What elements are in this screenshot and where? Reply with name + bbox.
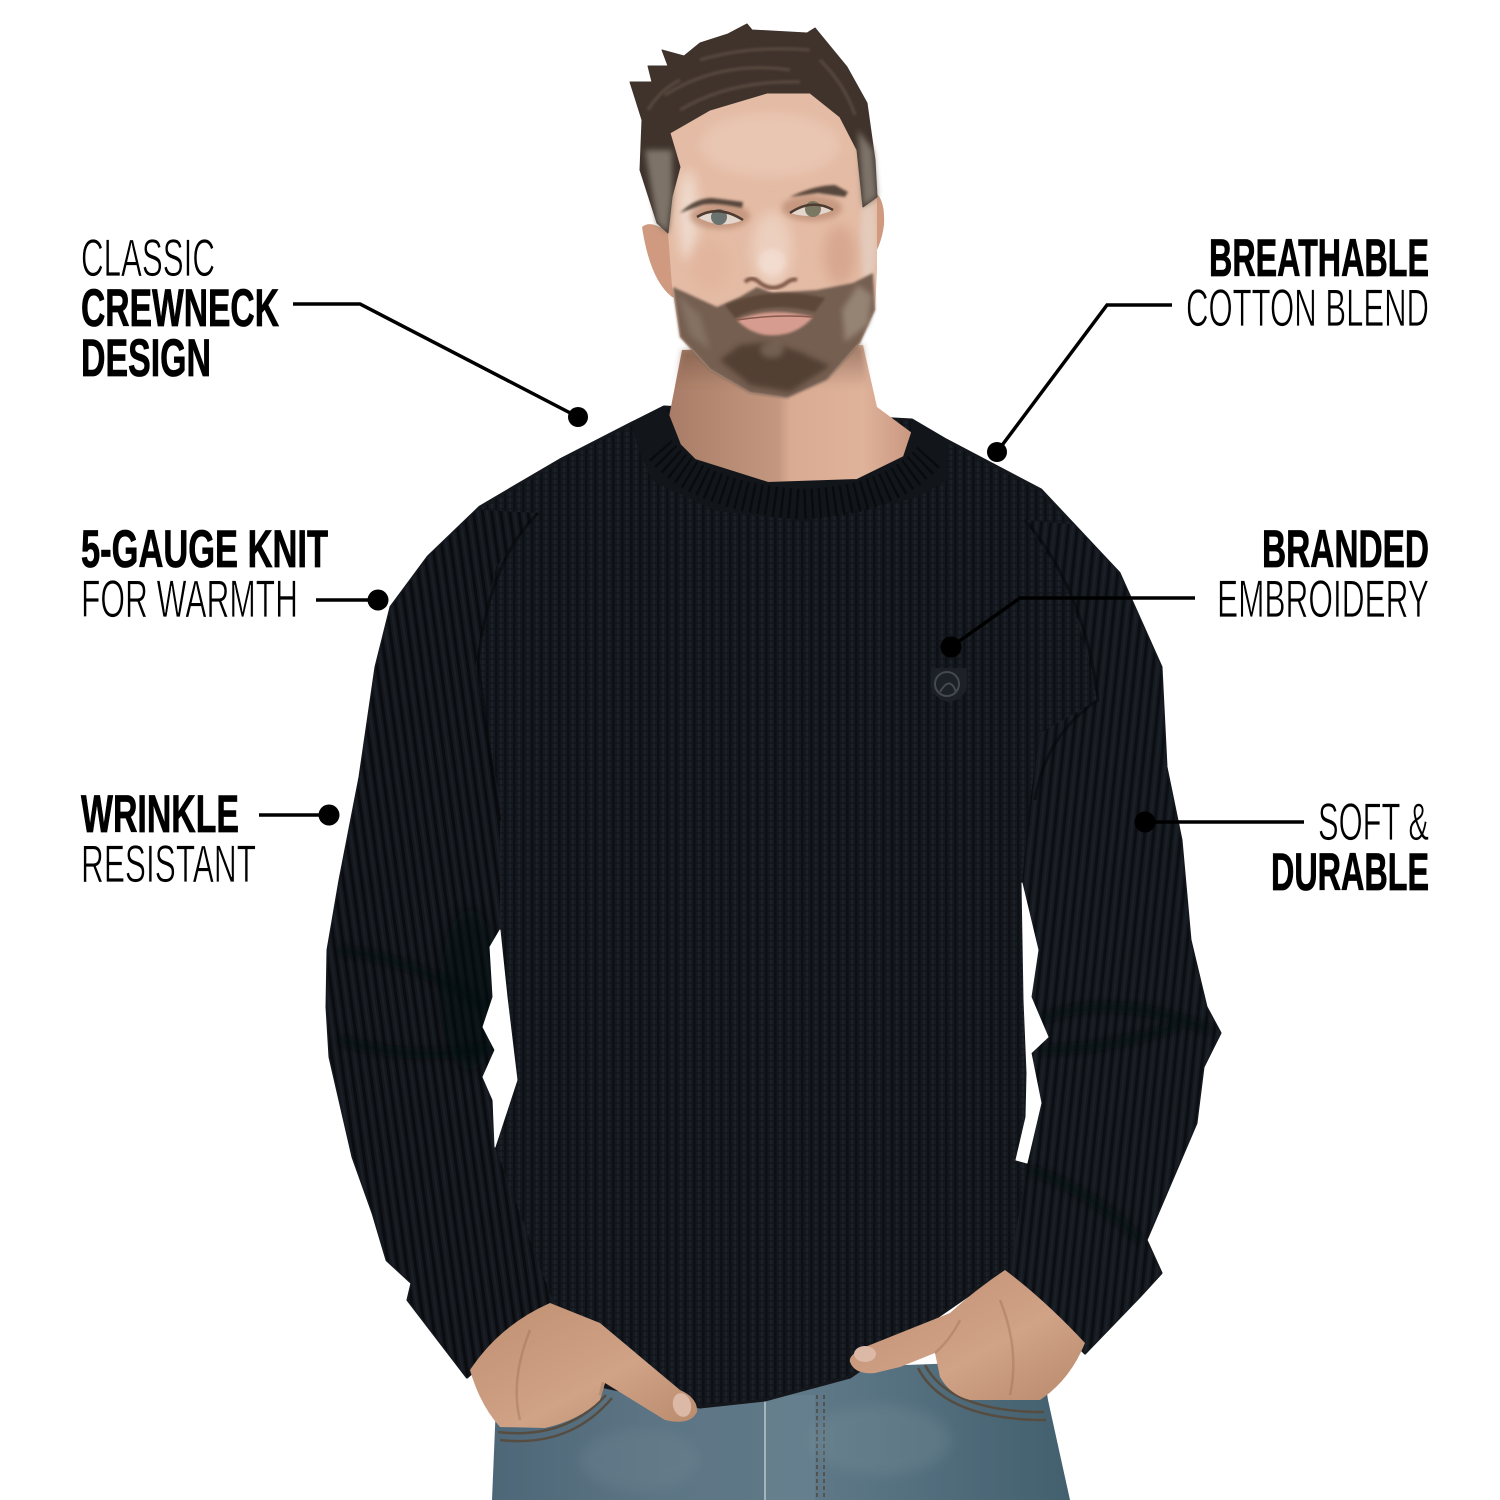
label text: DESIGN xyxy=(81,329,211,388)
callout: wrinkle resistant xyxy=(81,785,340,894)
callout: soft and durable xyxy=(1134,793,1429,902)
nose xyxy=(745,249,797,288)
label text: CREWNECK xyxy=(81,279,279,338)
eye sockets and eyes xyxy=(690,195,842,229)
label text xyxy=(81,520,328,629)
label text: WRINKLE xyxy=(81,785,239,844)
leader line xyxy=(293,304,588,427)
sweater xyxy=(300,407,1240,1407)
collar xyxy=(632,407,946,520)
beard shading xyxy=(678,285,872,392)
leader line xyxy=(1134,812,1304,832)
eyebrows xyxy=(680,185,848,213)
hair xyxy=(630,24,877,233)
greying sideburns xyxy=(645,130,877,233)
photo: man wearing crewneck sweater xyxy=(300,24,1240,1500)
callout: classic crewneck design xyxy=(81,229,588,427)
mouth line xyxy=(737,316,813,320)
leader line xyxy=(316,590,388,610)
hair strands xyxy=(648,49,855,115)
embroidered logo xyxy=(931,668,967,702)
neck xyxy=(669,345,912,483)
leader line xyxy=(259,804,340,826)
white gap under left arm xyxy=(483,930,517,1147)
left hand xyxy=(470,1303,697,1428)
label text xyxy=(1271,793,1429,902)
ears xyxy=(642,189,884,300)
lips xyxy=(737,312,813,335)
face shading xyxy=(678,113,876,290)
beard xyxy=(673,273,875,398)
label text xyxy=(1217,520,1429,629)
leader line xyxy=(940,598,1195,658)
label text: RESISTANT xyxy=(81,835,256,894)
callout: breathable cotton blend xyxy=(987,229,1429,462)
leader line xyxy=(987,305,1172,462)
face xyxy=(668,93,877,398)
callout: 5-gauge knit for warmth xyxy=(81,520,388,629)
jeans xyxy=(492,1360,1070,1500)
white gap under right arm xyxy=(1016,883,1048,1163)
head xyxy=(630,24,884,398)
right hand xyxy=(850,1270,1085,1400)
label text: 5-GAUGE KNIT xyxy=(81,520,328,579)
collar ribbing xyxy=(660,450,930,504)
label text xyxy=(1186,229,1429,338)
sleeves and folds xyxy=(300,500,1240,1400)
label text: CLASSIC xyxy=(81,229,215,288)
label text xyxy=(81,785,256,894)
neck shadow under beard xyxy=(669,345,870,440)
label text xyxy=(81,229,279,388)
callout: branded embroidery xyxy=(940,520,1429,658)
sweater silhouette with body knit xyxy=(327,407,1220,1407)
label text: FOR WARMTH xyxy=(81,570,298,629)
